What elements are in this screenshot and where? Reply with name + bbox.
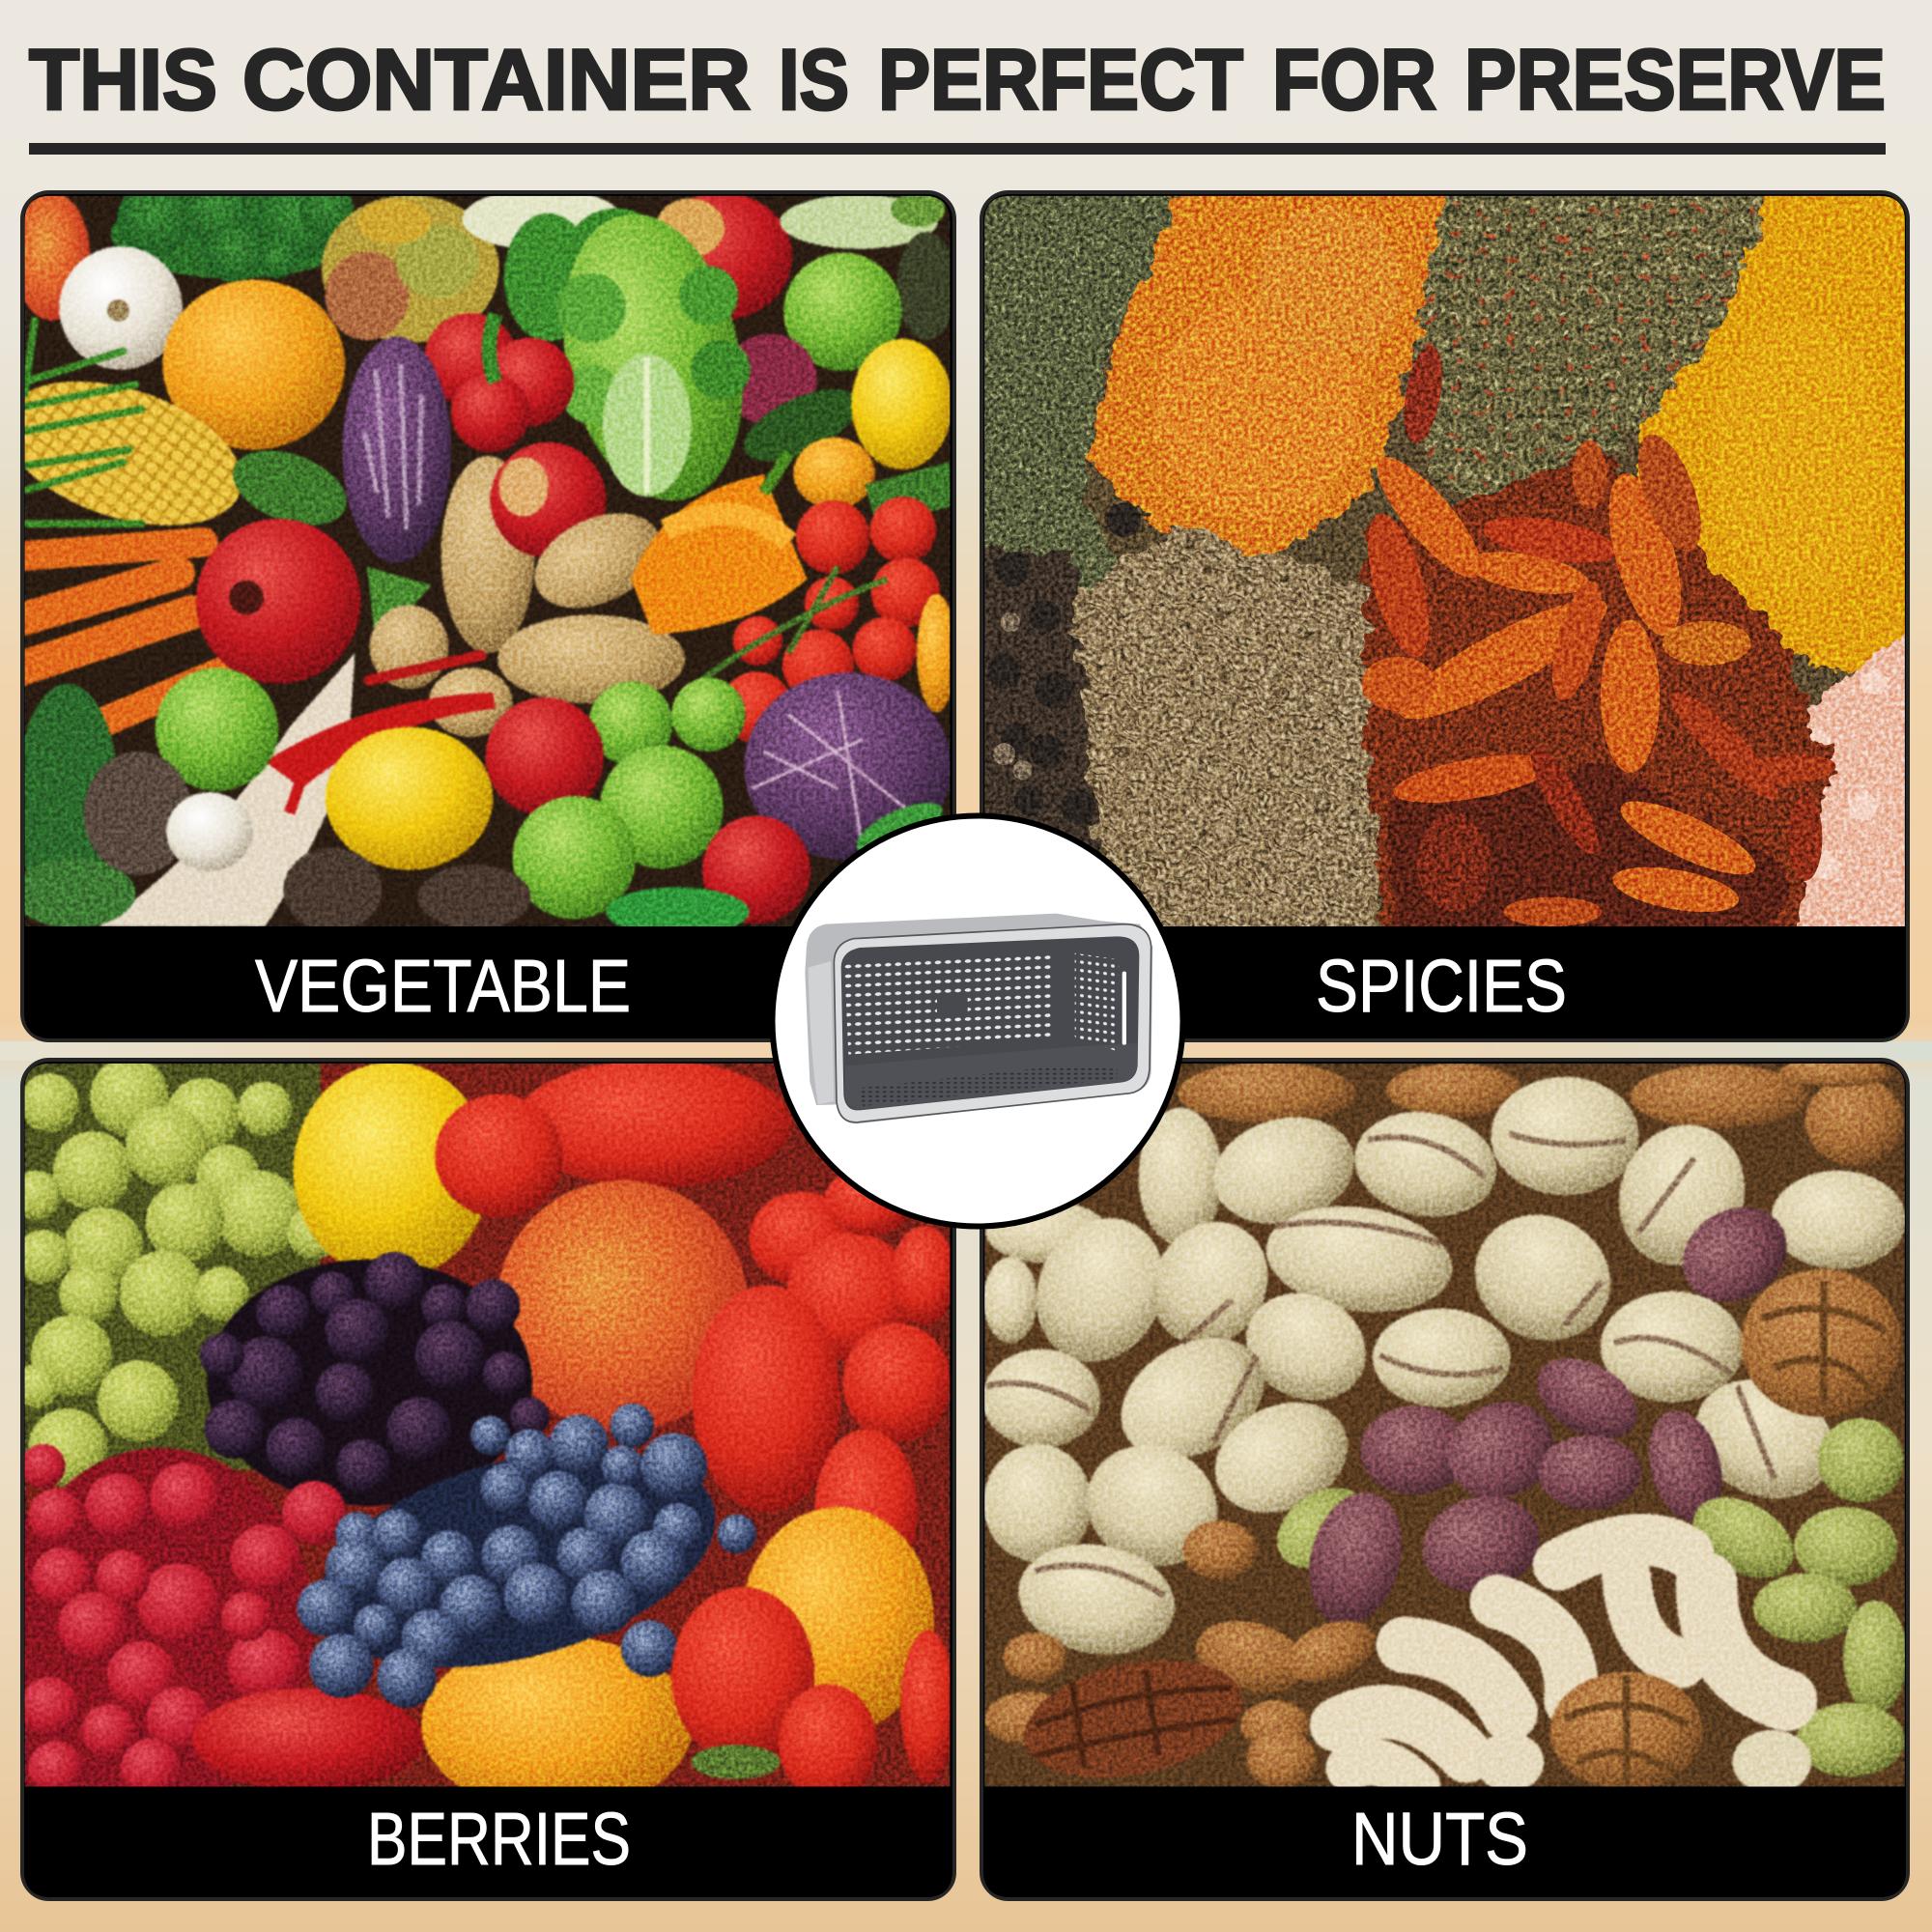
title: CONTAINER (242, 31, 751, 128)
photo: fruits and berries (6, 1057, 956, 1814)
label band: vegetable (24, 928, 952, 1038)
panel: vegetable (0, 178, 959, 1040)
photo: spices (984, 195, 1905, 927)
label band: berries (24, 1787, 952, 1897)
title underline (29, 143, 1886, 155)
photo: vegetables (0, 178, 959, 936)
title: THIS (29, 31, 217, 128)
title: PRESERVE (1464, 31, 1886, 128)
label band: spices (983, 928, 1906, 1038)
label: NUTS: NUTS (1351, 1798, 1528, 1881)
title: IS (779, 31, 849, 128)
label band: nuts (983, 1787, 1906, 1897)
photo: nuts (982, 1057, 1907, 1796)
icon: container basket (805, 914, 1152, 1123)
title (29, 31, 1886, 128)
title: PERFECT (878, 31, 1243, 128)
panel: spices (949, 160, 1932, 1040)
center circle with product (773, 815, 1182, 1227)
label: SPICIES: SPICIES (1316, 945, 1567, 1028)
panel: berries (6, 1057, 956, 1899)
label: VEGETABLE: VEGETABLE (255, 945, 631, 1028)
label: BERRIES: BERRIES (367, 1798, 631, 1881)
title: FOR (1272, 31, 1436, 128)
background: gap between rows (0, 1041, 1932, 1061)
panel: nuts (981, 1057, 1908, 1899)
